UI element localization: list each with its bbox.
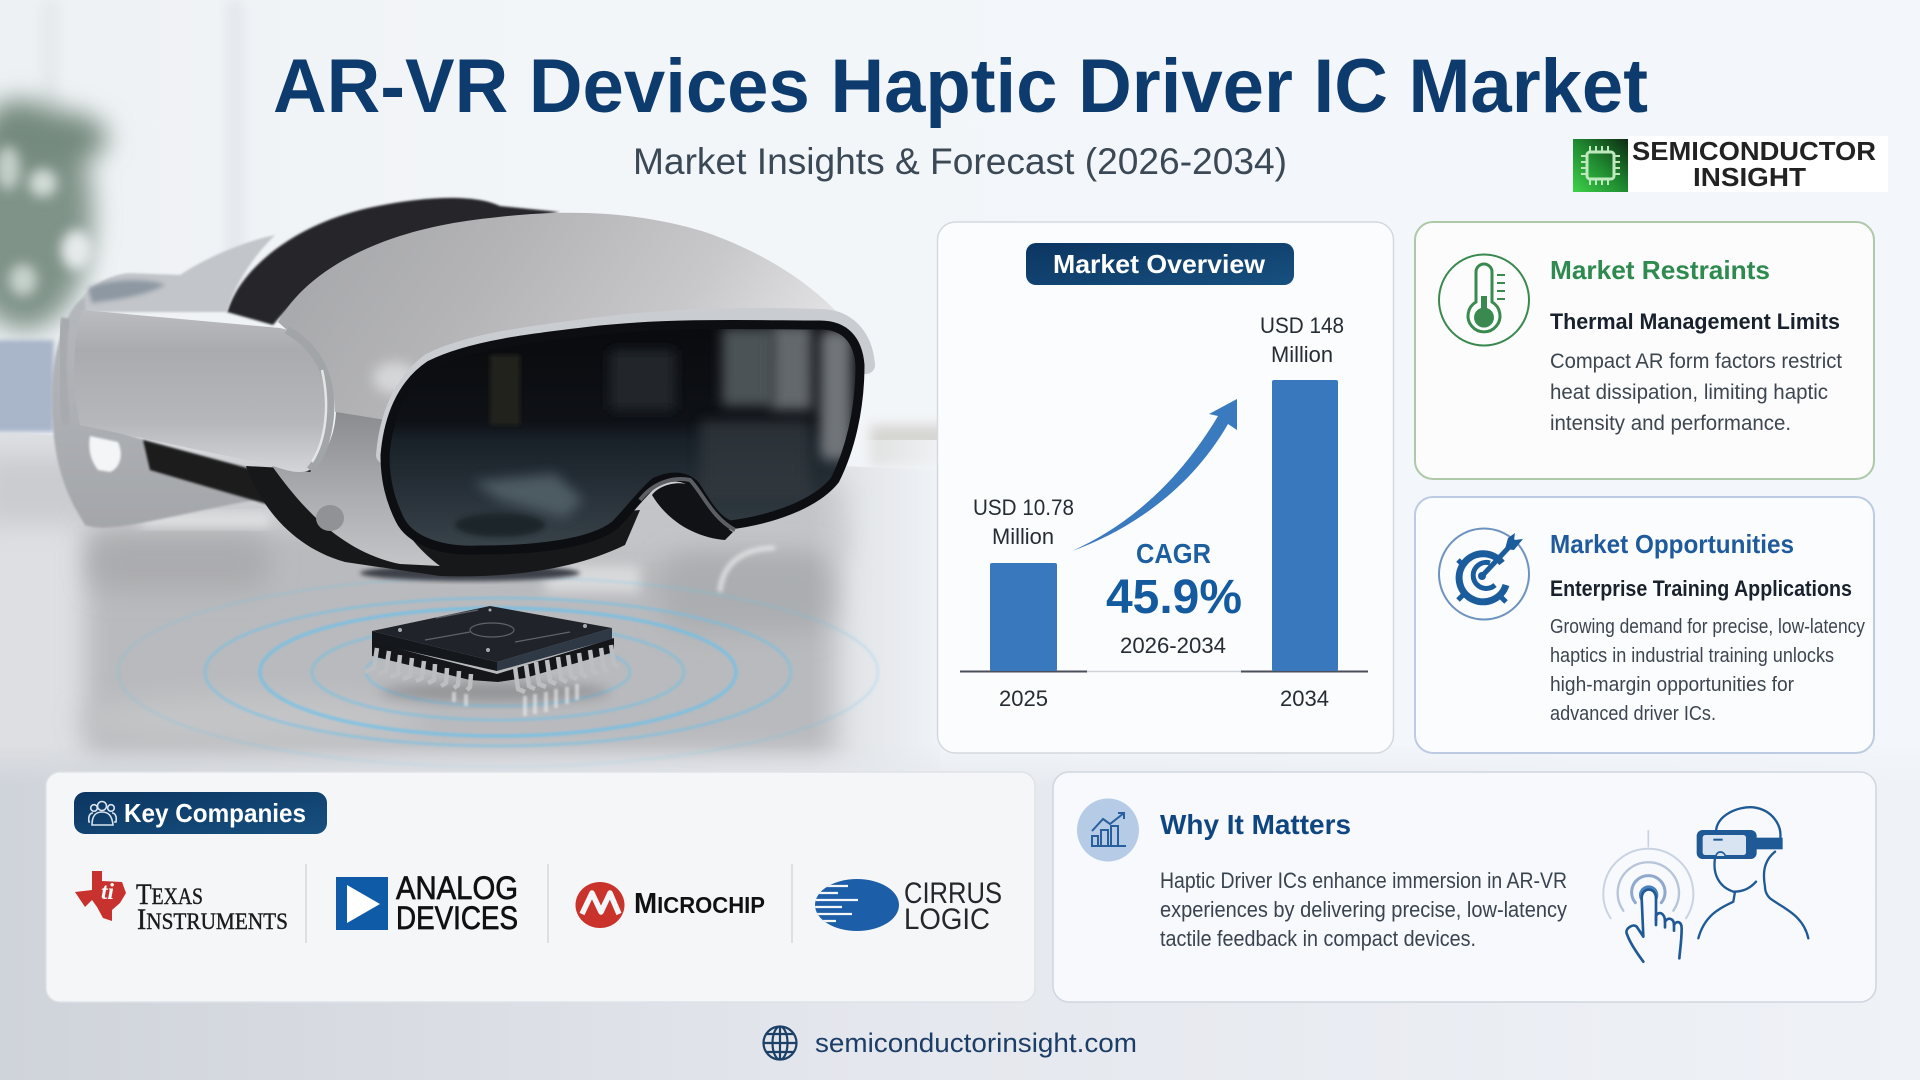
panel: key companies	[46, 772, 1035, 1002]
heading pill: Key Companies: Key Companies	[124, 798, 306, 828]
panel: why it matters	[1053, 772, 1876, 1002]
chip markings	[425, 610, 570, 642]
VR goggles	[1697, 830, 1783, 859]
logo: Analog Devices: ANALOG	[396, 870, 518, 906]
lower shell	[272, 412, 440, 566]
logo: Texas Instruments: INSTRUMENTS	[137, 903, 288, 936]
table surface	[0, 433, 940, 790]
CAGR callout: CAGR	[1136, 538, 1211, 569]
logo: Texas Instruments	[75, 871, 288, 936]
logo: Analog Devices	[336, 870, 518, 936]
left pins	[365, 648, 471, 690]
side strap	[74, 310, 330, 472]
bar chart: USD 148	[1260, 313, 1344, 338]
chip pin reflections	[454, 684, 577, 716]
body text	[1550, 350, 1842, 435]
heading: Market Opportunities	[1550, 529, 1794, 559]
visor frame	[385, 324, 860, 550]
chip shadow	[380, 682, 610, 702]
hand	[1626, 890, 1682, 962]
panel: market overview	[938, 222, 1394, 753]
nose bridge	[652, 483, 733, 540]
CAGR callout: 45.9%	[1106, 571, 1242, 624]
bar chart: 2025	[999, 686, 1048, 711]
contact shadow	[360, 565, 580, 581]
bar chart	[960, 313, 1368, 711]
bar 2025	[990, 563, 1057, 671]
body text: experiences by delivering precise, low-latency	[1160, 897, 1567, 922]
panel: market opportunities	[1415, 497, 1874, 753]
frame opening	[89, 436, 121, 472]
logo: Cirrus Logic: LOGIC	[904, 903, 990, 936]
body text: haptics in industrial training unlocks	[1550, 645, 1834, 667]
icon: growth chart	[1077, 798, 1139, 862]
logo: Semiconductor Insight: SEMICONDUCTOR	[1632, 136, 1876, 166]
body text: advanced driver ICs.	[1550, 703, 1716, 725]
table reflections	[80, 514, 835, 745]
icon: people	[89, 802, 116, 825]
heading pill: Key Companies	[74, 792, 327, 834]
bar chart: USD 10.78	[973, 495, 1074, 520]
CAGR callout: 2026-2034	[1120, 633, 1226, 658]
icon: target with arrow	[1439, 528, 1529, 620]
bar chart: Million	[992, 524, 1054, 549]
black inner pad	[143, 440, 270, 505]
rear strap	[80, 234, 274, 313]
icon: chip	[1581, 146, 1620, 185]
logo: Semiconductor Insight	[1573, 136, 1888, 192]
dome shell	[278, 213, 868, 422]
headset	[52, 198, 870, 581]
body text: Growing demand for precise, low-latency	[1550, 616, 1865, 638]
illustration: VR user with haptic touch	[1603, 807, 1808, 962]
lower shell edge	[246, 466, 640, 576]
body text: tactile feedback in compact devices.	[1160, 926, 1476, 951]
blurred room background	[0, 0, 950, 467]
bar chart: 2034	[1280, 686, 1329, 711]
logo: Microchip	[576, 882, 765, 928]
body text	[1160, 868, 1567, 951]
heading pill: Market Overview: Market Overview	[1053, 249, 1266, 279]
heading: Market Restraints	[1550, 255, 1770, 285]
title: AR-VR Devices Haptic Driver IC Market	[273, 44, 1648, 129]
heading: Why It Matters	[1160, 809, 1351, 840]
visor lens	[390, 329, 856, 546]
visor silver bezel	[385, 317, 866, 455]
body text: Compact AR form factors restrict	[1550, 350, 1842, 373]
heading pill: Market Overview	[1026, 243, 1294, 285]
right pins	[515, 645, 619, 692]
body text: heat dissipation, limiting haptic	[1550, 381, 1828, 404]
logo: Analog Devices: DEVICES	[396, 900, 518, 936]
body text: intensity and performance.	[1550, 412, 1791, 435]
logo: Semiconductor Insight: INSIGHT	[1693, 162, 1806, 192]
touch rings	[1603, 831, 1693, 918]
icon: globe	[764, 1026, 796, 1060]
person	[1698, 807, 1808, 938]
logo: Texas Instruments: ti	[101, 879, 115, 904]
panel: market restraints	[1415, 222, 1874, 479]
chip under-body	[372, 638, 614, 682]
CAGR callout	[1106, 538, 1242, 658]
body text	[1550, 616, 1865, 725]
bottom background band	[0, 755, 1532, 1080]
footer: website: semiconductorinsight.com	[815, 1028, 1137, 1058]
bar 2034	[1272, 380, 1338, 671]
chip	[365, 606, 619, 716]
logo: Cirrus Logic	[815, 879, 1001, 931]
rear frame	[52, 298, 255, 528]
body text: high-margin opportunities for	[1550, 674, 1794, 696]
subheading: Enterprise Training Applications	[1550, 576, 1852, 601]
body text: Haptic Driver ICs enhance immersion in AR-VR	[1160, 868, 1567, 893]
icon: thermometer	[1439, 254, 1529, 346]
hero photo: headset on table with chip	[0, 0, 950, 790]
logo: Cirrus Logic: CIRRUS	[904, 877, 1002, 910]
headband	[227, 198, 560, 325]
logo: Microchip: MICROCHIP	[634, 888, 765, 920]
chip body	[372, 631, 497, 671]
bar chart: Million	[1271, 342, 1333, 367]
sensor	[316, 505, 344, 531]
growth arrow	[1072, 399, 1237, 551]
subtitle: Market Insights & Forecast (2026-2034)	[633, 141, 1287, 182]
logo: Texas Instruments: TEXAS	[136, 878, 203, 911]
waves: haptic rings	[118, 577, 878, 767]
subheading: Thermal Management Limits	[1550, 309, 1840, 334]
